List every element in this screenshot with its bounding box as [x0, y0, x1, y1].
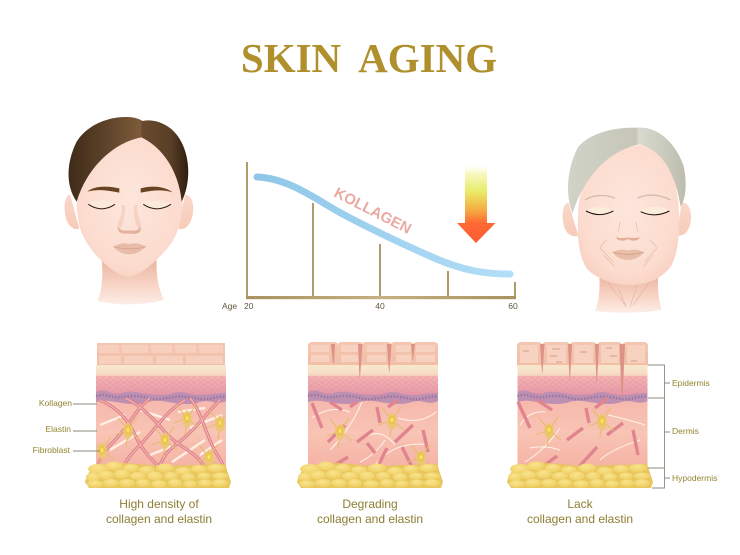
right bracket labels: Dermis [672, 426, 699, 436]
fibroblasts [97, 404, 225, 465]
axis labels [222, 301, 518, 311]
axis labels: Age [222, 301, 237, 311]
face shape [77, 137, 183, 277]
corneum cell marks [523, 348, 637, 362]
decline arrow [457, 163, 496, 243]
eyebrows [87, 187, 173, 193]
fat layer [297, 462, 443, 488]
collagen curve [257, 177, 510, 274]
ears [65, 194, 193, 229]
right bracket labels [648, 365, 717, 488]
axes and bars [247, 162, 515, 298]
axis labels: 60 [508, 301, 518, 311]
left callouts: Fibroblast [33, 445, 71, 455]
skin layers [308, 365, 438, 468]
corneum cell highlights [520, 345, 645, 363]
mouth [613, 250, 644, 260]
right bracket labels: Hypodermis [672, 473, 717, 483]
eyes [88, 200, 171, 209]
hair [568, 128, 686, 213]
eyebrows [585, 195, 671, 200]
corneum cells [99, 345, 223, 364]
collagen fragments [312, 400, 428, 468]
collagen fragments [518, 398, 638, 468]
caption: young: collagen and elastin [106, 512, 212, 526]
fat layer [85, 462, 231, 488]
skin layers [96, 365, 226, 468]
panel: aged skin block [507, 342, 653, 488]
caption: degrading: collagen and elastin [317, 512, 423, 526]
white fibres [312, 402, 436, 465]
fibroblasts [536, 408, 614, 447]
eyes [586, 207, 669, 215]
axis labels: 20 [244, 301, 254, 311]
curve label: KOLLAGEN [331, 184, 414, 238]
left callouts: Elastin [45, 424, 71, 434]
fat layer [507, 462, 653, 488]
nose [118, 227, 141, 234]
caption: lack: collagen and elastin [527, 512, 633, 526]
panel: degrading skin block [297, 342, 443, 488]
hair [69, 117, 188, 202]
axis labels: 40 [375, 301, 385, 311]
stratum corneum [97, 343, 225, 366]
nose bridge [117, 205, 141, 230]
dermis fibres [97, 398, 225, 466]
white fibres [520, 412, 645, 462]
panel: young skin block [85, 343, 232, 488]
chart: collagen decline with age [222, 162, 518, 311]
furrows [331, 344, 415, 378]
neck [595, 275, 662, 313]
neck wrinkles [608, 283, 648, 307]
furrows [540, 344, 625, 397]
ears [563, 202, 691, 236]
corneum cell highlights [311, 345, 435, 362]
old face [563, 128, 691, 313]
caption: lack: Lack [567, 497, 594, 511]
eyelashes [586, 211, 669, 215]
wrinkles [600, 222, 657, 267]
caption: degrading: Degrading [342, 497, 398, 511]
stratum corneum [517, 342, 648, 366]
caption: young: High density of [119, 497, 199, 511]
fibroblasts [327, 407, 433, 474]
stratum corneum [308, 342, 438, 366]
left callouts: Kollagen [39, 398, 72, 408]
young face [65, 117, 193, 304]
right bracket labels: Epidermis [672, 378, 710, 388]
left callouts [33, 398, 100, 455]
nose [616, 237, 639, 241]
eyelashes [88, 204, 171, 209]
baseline [246, 296, 516, 299]
skin layers [518, 365, 648, 468]
neck [97, 260, 164, 304]
mouth [113, 243, 146, 254]
title: SKIN AGING [241, 35, 497, 81]
face shape [578, 145, 679, 285]
collagen bundles [98, 398, 224, 468]
